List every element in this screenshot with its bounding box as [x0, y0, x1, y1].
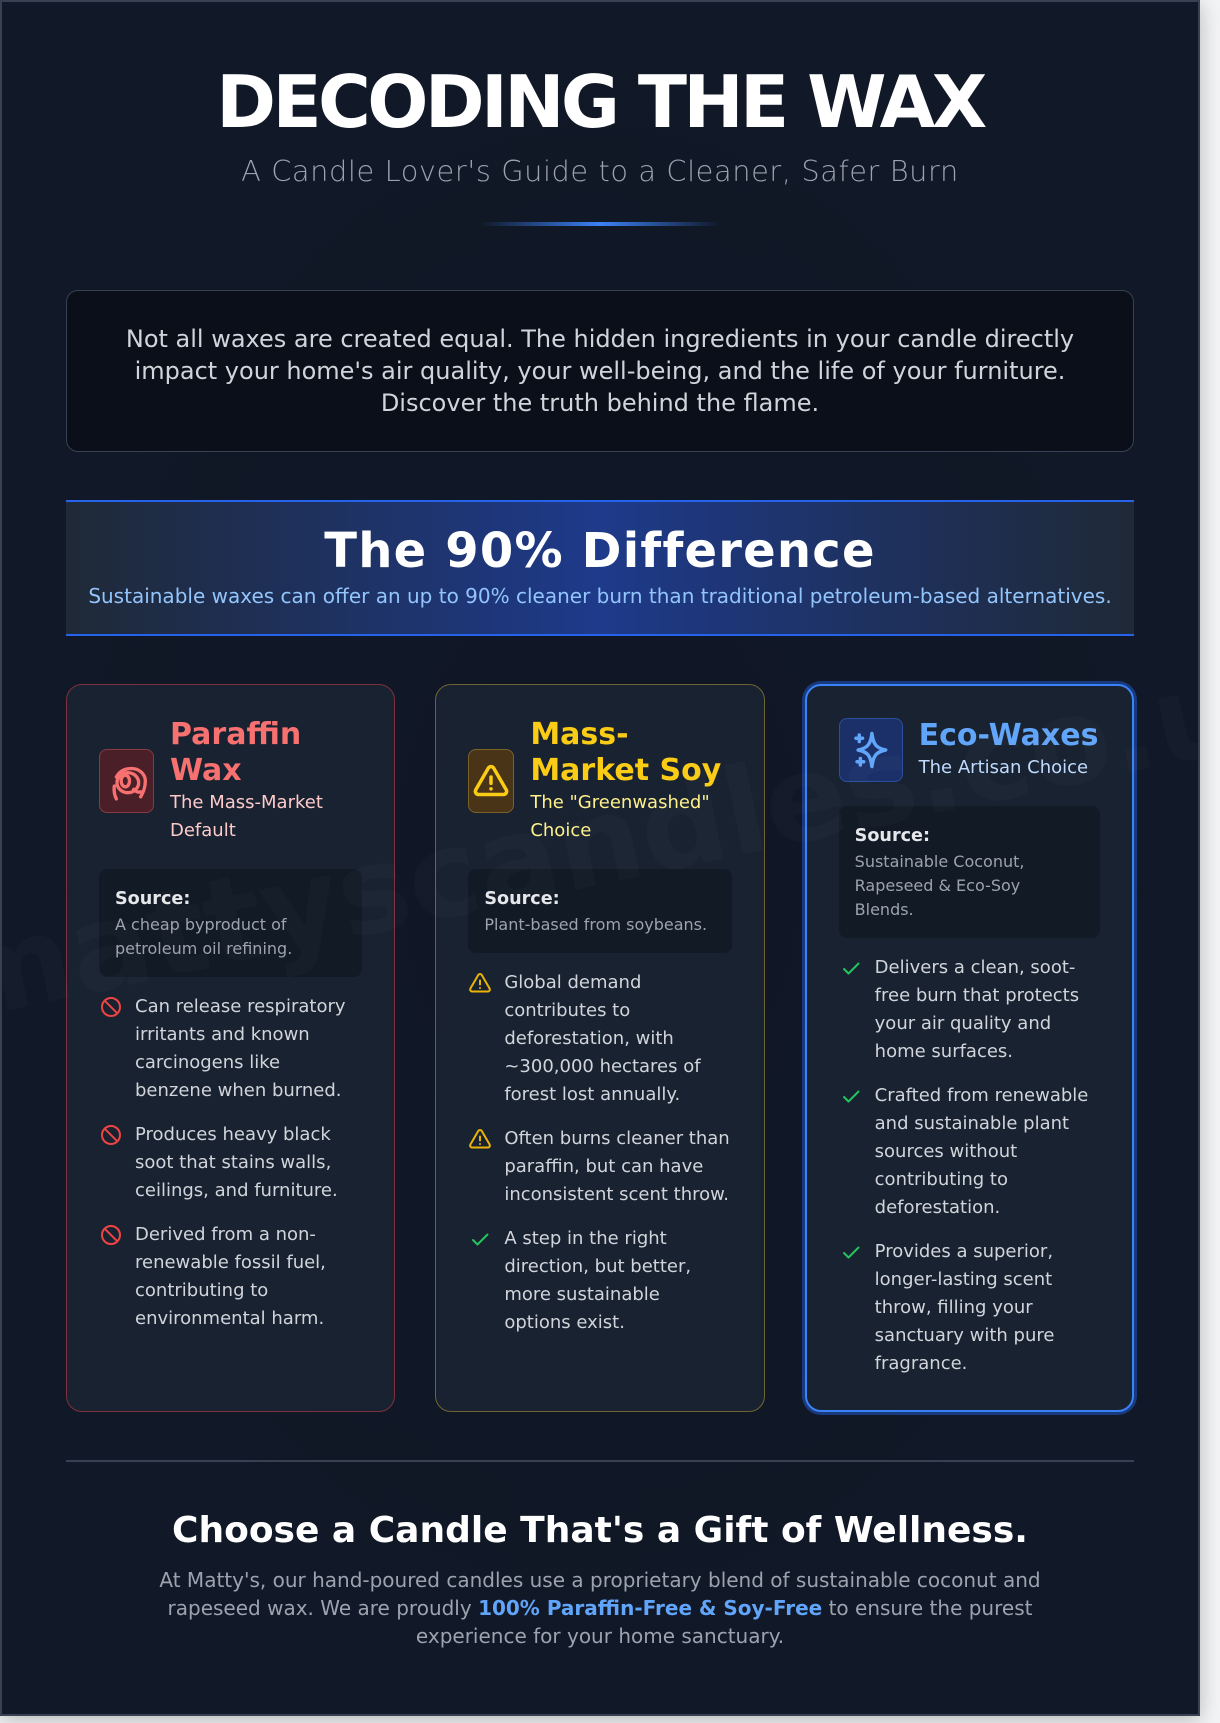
soy header	[468, 717, 721, 841]
paraffin list: Derived from a non-	[135, 1224, 316, 1245]
banner: the 90% difference: Sustainable waxes can offer an up to 90% cleaner burn than traditional petroleum-based alternatives.	[88, 584, 1112, 608]
eco source: Rapeseed & Eco-Soy	[855, 876, 1020, 895]
comparison cards	[66, 681, 1137, 1415]
eco source: Sustainable Coconut,	[855, 852, 1024, 871]
soy heading	[530, 717, 721, 841]
paraffin list: renewable fossil fuel,	[135, 1252, 326, 1273]
paraffin source: petroleum oil refining.	[115, 939, 292, 958]
paraffin heading: Paraffin	[170, 717, 301, 752]
eco list: Crafted from renewable	[875, 1085, 1088, 1106]
soy list: deforestation, with	[504, 1028, 674, 1049]
eco list: your air quality and	[875, 1013, 1051, 1034]
eco list: sanctuary with pure	[875, 1325, 1054, 1346]
paraffin list: contributing to	[135, 1280, 268, 1301]
icon: smoke swirl	[99, 749, 154, 813]
soy source: Source:	[484, 889, 560, 909]
eco source: Source:	[855, 826, 930, 846]
paraffin heading	[170, 717, 323, 841]
intro panel: impact your home's air quality, your well-being, and the life of your furniture.	[135, 357, 1065, 385]
eco list: free burn that protects	[875, 985, 1079, 1006]
eco list: home surfaces.	[875, 1041, 1013, 1062]
banner: the 90% difference	[66, 500, 1134, 636]
soy list: options exist.	[504, 1312, 625, 1333]
paraffin header	[99, 717, 323, 841]
panel: mass-market soy	[435, 684, 765, 1412]
paraffin heading: Wax	[170, 753, 242, 788]
paraffin source	[99, 869, 362, 977]
icon: warning triangle	[468, 749, 514, 813]
soy list: more sustainable	[504, 1284, 660, 1305]
soy list: ~300,000 hectares of	[504, 1056, 701, 1077]
paraffin heading: The Mass-Market	[170, 792, 323, 813]
soy heading: Mass-	[530, 717, 629, 752]
eco list: and sustainable plant	[875, 1113, 1069, 1134]
soy list: forest lost annually.	[504, 1084, 680, 1105]
soy list: Global demand	[504, 972, 641, 993]
eco list: fragrance.	[875, 1353, 967, 1374]
eco heading	[918, 718, 1098, 778]
soy heading: Market Soy	[530, 753, 721, 788]
soy source: Plant-based from soybeans.	[484, 915, 707, 934]
icon: sparkles	[839, 718, 903, 782]
eco list: longer-lasting scent	[875, 1269, 1052, 1290]
panel: eco-waxes	[805, 684, 1134, 1412]
soy list	[469, 972, 730, 1333]
soy list: inconsistent scent throw.	[504, 1184, 729, 1205]
eco heading: The Artisan Choice	[919, 757, 1088, 778]
paraffin list: carcinogens like	[135, 1052, 280, 1073]
paraffin list: soot that stains walls,	[135, 1152, 331, 1173]
soy heading: The "Greenwashed"	[530, 792, 710, 813]
intro panel	[66, 290, 1134, 452]
panel: paraffin wax	[66, 684, 395, 1412]
eco list	[843, 957, 1088, 1374]
intro panel: Discover the truth behind the flame.	[381, 389, 819, 417]
paraffin list: irritants and known	[135, 1024, 310, 1045]
footer call to action	[66, 1460, 1134, 1650]
paraffin heading: Default	[170, 820, 236, 841]
eco list: contributing to	[875, 1169, 1008, 1190]
paraffin list: Can release respiratory	[135, 996, 346, 1017]
paraffin list: Produces heavy black	[135, 1124, 331, 1145]
eco list: sources without	[875, 1141, 1017, 1162]
soy list: A step in the right	[504, 1228, 667, 1249]
soy list: Often burns cleaner than	[504, 1128, 730, 1149]
paraffin source: A cheap byproduct of	[115, 915, 287, 934]
footer heading: Choose a Candle That's a Gift of Wellness.	[172, 1510, 1028, 1551]
soy heading: Choice	[530, 820, 591, 841]
eco source: Blends.	[855, 900, 914, 919]
eco list: Delivers a clean, soot-	[875, 957, 1075, 978]
footer text: experience for your home sanctuary.	[416, 1624, 784, 1648]
subtitle: A Candle Lover's Guide to a Cleaner, Safer Burn	[241, 154, 959, 188]
eco source	[839, 806, 1100, 938]
paraffin list: ceilings, and furniture.	[135, 1180, 338, 1201]
paraffin list: environmental harm.	[135, 1308, 324, 1329]
soy list: contributes to	[504, 1000, 630, 1021]
soy list: paraffin, but can have	[504, 1156, 703, 1177]
eco list: deforestation.	[875, 1197, 1000, 1218]
eco header	[839, 718, 1098, 782]
footer text: rapeseed wax. We are proudly 100% Paraffin-Free & Soy-Free to ensure the purest	[168, 1596, 1032, 1620]
title: DECODING THE WAX	[216, 60, 984, 144]
footer text	[159, 1568, 1041, 1648]
paraffin list	[101, 996, 346, 1329]
paraffin list: benzene when burned.	[135, 1080, 342, 1101]
eco list: Provides a superior,	[875, 1241, 1053, 1262]
eco list: throw, filling your	[875, 1297, 1033, 1318]
footer text: At Matty's, our hand-poured candles use a proprietary blend of sustainable coconut and	[159, 1568, 1041, 1592]
banner: the 90% difference: The 90% Difference	[324, 523, 876, 579]
soy source	[468, 869, 732, 953]
paraffin source: Source:	[115, 889, 190, 909]
intro panel: Not all waxes are created equal. The hidden ingredients in your candle directly	[126, 325, 1074, 353]
eco heading: Eco-Waxes	[919, 718, 1098, 753]
soy list: direction, but better,	[504, 1256, 691, 1277]
